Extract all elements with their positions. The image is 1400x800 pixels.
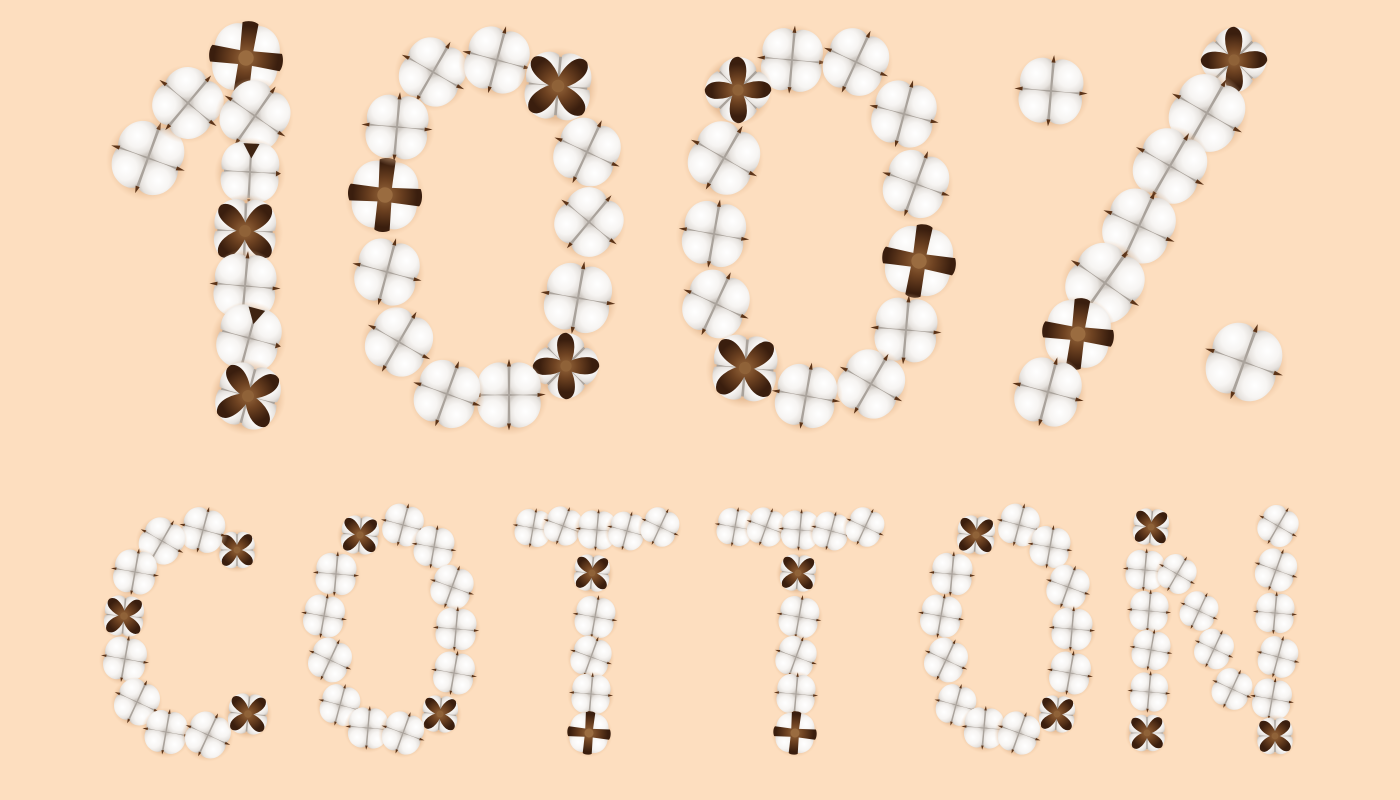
digit: 1 bbox=[94, 14, 309, 444]
letter: O (first) bbox=[295, 496, 484, 765]
percent sign bbox=[999, 10, 1300, 442]
letter: T (second) bbox=[709, 498, 894, 760]
letter: C bbox=[95, 499, 274, 771]
letter: O (second) bbox=[912, 496, 1100, 765]
digit: first 0 bbox=[340, 14, 642, 444]
letter: T (first) bbox=[507, 498, 689, 760]
letter: N bbox=[1119, 495, 1309, 759]
digit: second 0 bbox=[665, 13, 966, 440]
